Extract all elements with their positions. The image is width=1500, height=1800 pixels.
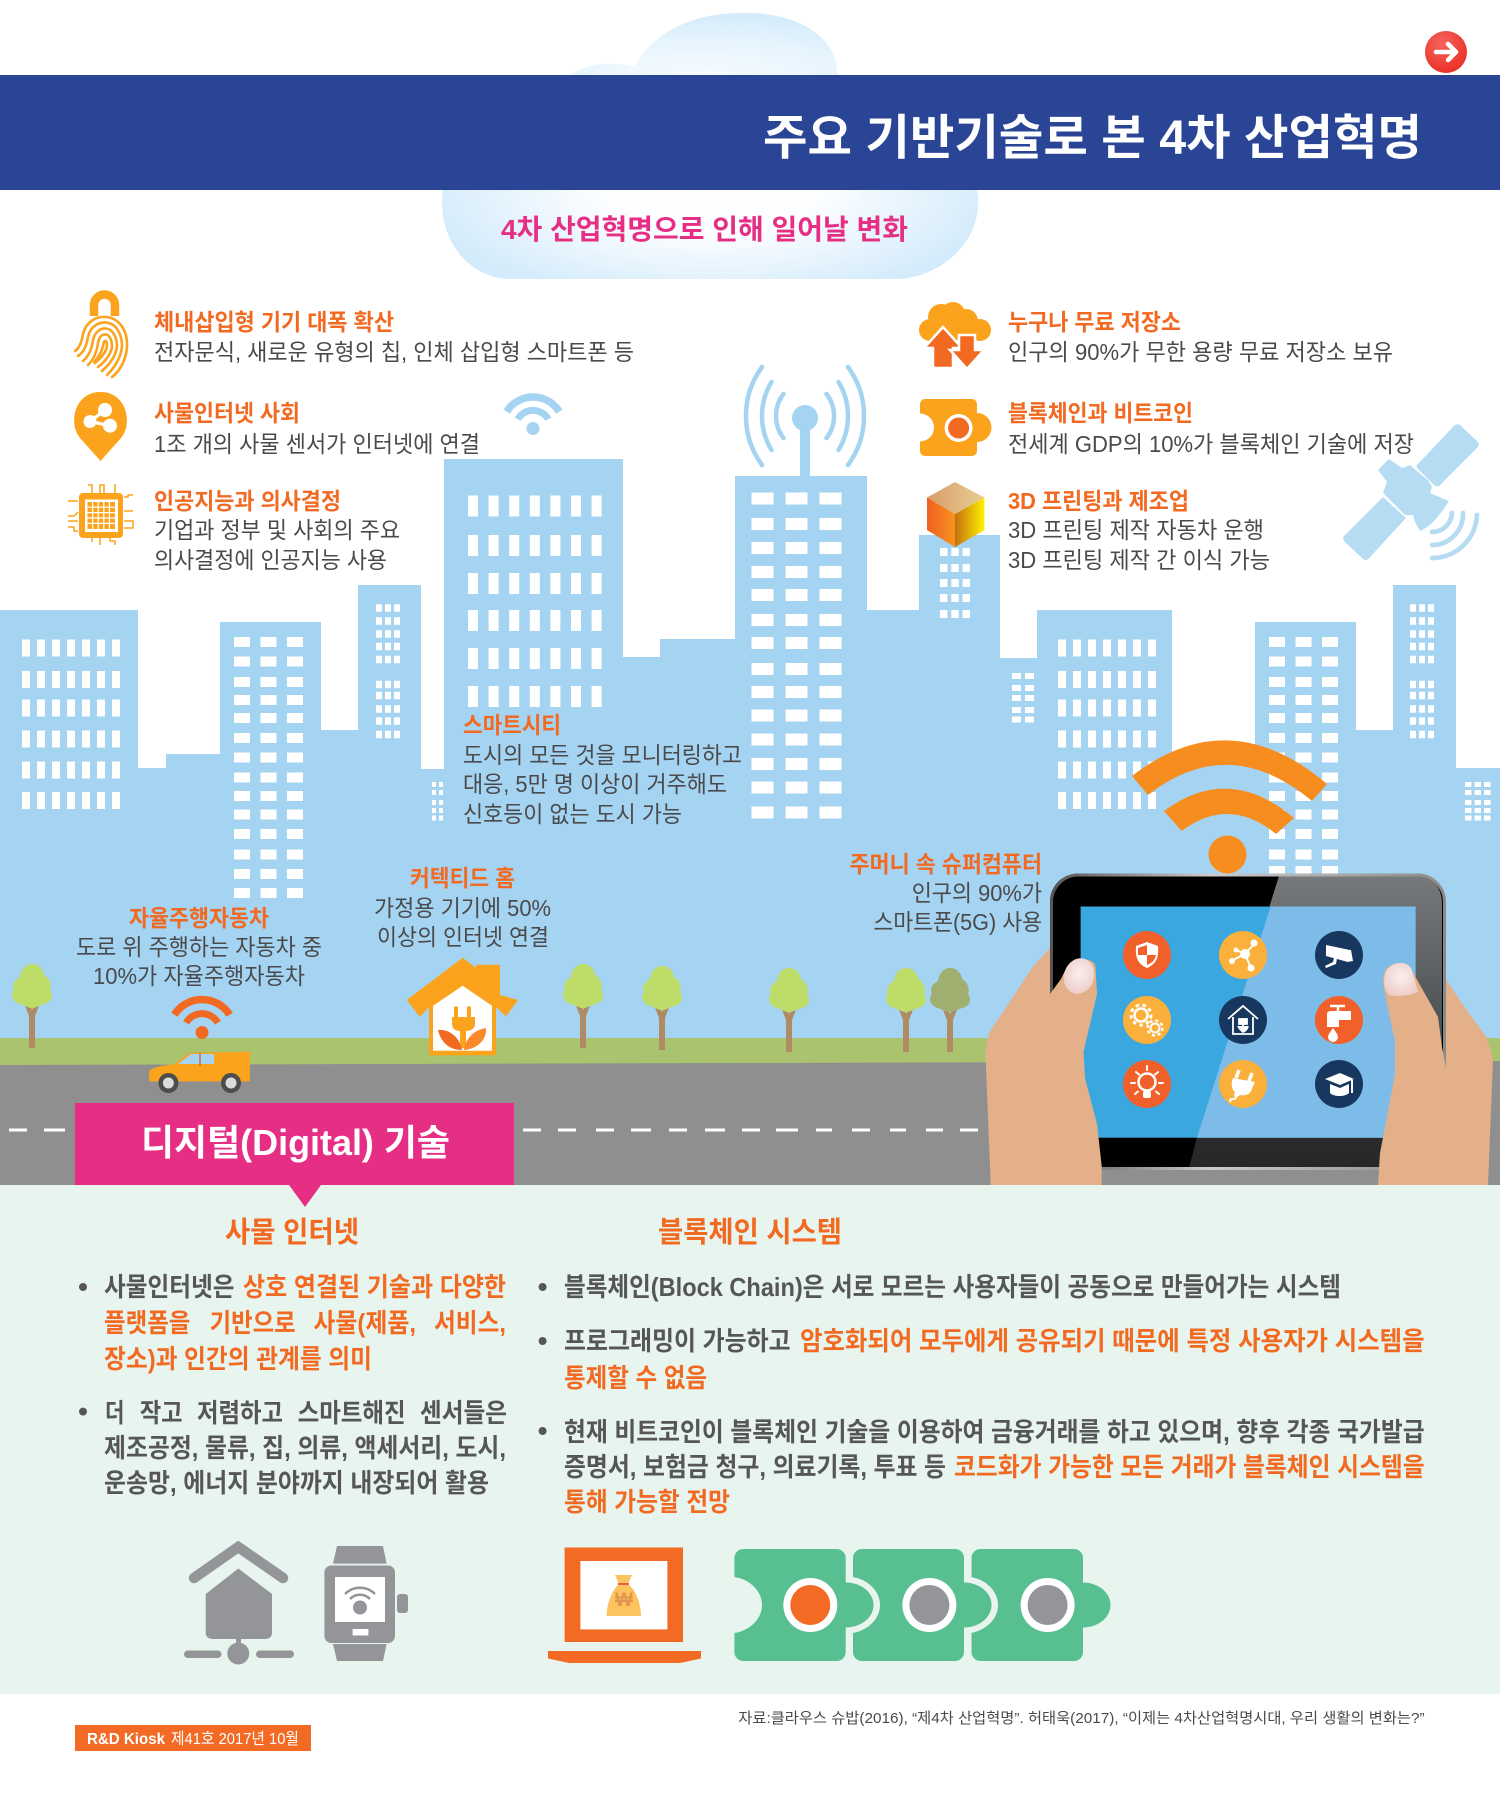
icon: satellite [1343,424,1479,560]
bullet 1: 플랫폼을 [104,1308,190,1338]
heading: 주머니 속 슈퍼컴퓨터 [850,851,1042,877]
bullet 3: 통해 가능할 전망 [564,1487,730,1517]
bullet 1: 상호 연결된 기술과 다양한 [243,1272,506,1302]
description line 2: 의사결정에 인공지능 사용 [154,547,387,573]
heading: 커텍티드 홈 [410,865,515,891]
issue tag [75,1725,311,1751]
bullet 2: 작고 [140,1398,183,1428]
heading: 누구나 무료 저장소 [1008,309,1181,335]
heading: 3D 프린팅과 제조업 [1008,488,1189,514]
bullet 1: 서비스, [434,1308,506,1338]
description: 전자문식, 새로운 유형의 칩, 인체 삽입형 스마트폰 등 [154,339,634,365]
money bag: ₩ [615,1590,633,1611]
callout: autonomous car [76,905,322,989]
bullet 2: 운송망, 에너지 분야까지 내장되어 활용 [104,1468,489,1498]
icon: fingerprint lock [75,294,127,377]
callout: pocket supercomputer [850,851,1042,935]
item: 3D printing [927,482,1270,573]
bullet 3: 증명서, 보험금 청구, 의료기록, 투표 등 [564,1452,946,1482]
bullet 1: 블록체인(Block Chain)은 서로 모르는 사용자들이 공동으로 만들어가는 시스템 [564,1272,1341,1302]
description: 전세계 GDP의 10%가 블록체인 기술에 저장 [1008,431,1414,457]
description line 1: 기업과 정부 및 사회의 주요 [154,517,400,543]
line 1: 도로 위 주행하는 자동차 중 [76,934,322,960]
heading: 체내삽입형 기기 대폭 확산 [154,309,394,335]
app icon: smart home [1219,996,1267,1044]
hand: right with thumb [1378,963,1493,1185]
callout: smart city [463,712,742,827]
icon: car wifi [174,999,230,1039]
heading: 사물인터넷 사회 [154,400,300,426]
heading: 인공지능과 의사결정 [154,488,341,514]
app icon: plug [1219,1060,1267,1108]
bullet 2: 통제할 수 없음 [564,1363,707,1393]
bullet 1: 사물인터넷은 [104,1272,234,1302]
line 2: 대응, 5만 명 이상이 거주해도 [463,771,727,797]
tablet with hands [985,874,1493,1185]
line 3: 신호등이 없는 도시 가능 [463,801,682,827]
bullet 1 [79,1272,506,1374]
icon: car [149,1052,250,1093]
top cloud [568,13,837,76]
ground strip [0,1038,1500,1066]
icon: red arrow button [1425,31,1467,73]
line 1: 가정용 기기에 50% [374,895,551,921]
item: blockchain and bitcoin [906,399,1414,457]
heading: 블록체인과 비트코인 [1008,400,1193,426]
pink banner: digital technology [75,1103,514,1207]
subtitle cloud [442,190,978,279]
trees [12,964,970,1052]
app icon: gears [1123,996,1171,1044]
road [0,1061,1500,1185]
icon: cloud with arrows [919,302,991,369]
thumbnail [1384,963,1418,996]
source note: 자료:클라우스 슈밥(2016), “제4차 산업혁명”. 허태욱(2017), “이제는 4차산업혁명시대, 우리 생활의 변화는?” [738,1710,1425,1727]
icon: location pin with share [74,392,127,461]
item: AI and decision making [68,484,400,573]
digital technology section background [0,1185,1500,1694]
subtitle: 4차 산업혁명으로 인해 일어날 변화 [501,214,908,245]
panel: blockchain system [539,1216,1425,1517]
hand: left with thumb [985,948,1102,1185]
icon: smart watch [324,1546,408,1661]
app icon: graduation cap [1315,1060,1363,1108]
app icon: shield [1123,931,1171,979]
title: 주요 기반기술로 본 4차 산업혁명 [763,112,1422,165]
line 1: 도시의 모든 것을 모니터링하고 [463,742,742,768]
title banner [0,75,1500,190]
item: fingerprint lock [75,294,634,377]
icon: broadcast antenna [746,367,864,478]
item: internet of things society [74,392,480,461]
description line 2: 3D 프린팅 제작 간 이식 가능 [1008,547,1270,573]
bullet 2 [539,1326,1425,1393]
heading: 자율주행자동차 [129,905,269,931]
issue tag: R&D Kiosk [87,1731,165,1748]
icon: laptop with money bag [548,1548,701,1663]
bullet 3 [539,1417,1425,1517]
bullet 2: 센서들은 [420,1398,507,1428]
callout: connected home [374,865,551,950]
issue tag: 제41호 2017년 10월 [171,1730,299,1748]
panel: internet of things [79,1216,507,1498]
line 1: 인구의 90%가 [912,880,1042,906]
bullet 2: 스마트해진 [298,1398,406,1428]
bullet 3: 코드화가 가능한 모든 거래가 블록체인 시스템을 [954,1452,1425,1482]
icon: blockchain puzzle chain [694,1549,1110,1661]
bullet 2: 프로그래밍이 가능하고 [564,1326,791,1356]
line 2: 이상의 인터넷 연결 [377,924,549,950]
bullet 1: 사물(제품, [313,1308,416,1338]
icon: chip [68,484,133,545]
bullet 2: 저렴하고 [197,1398,283,1428]
description line 1: 3D 프린팅 제작 자동차 운행 [1008,517,1264,543]
icon: connected home [407,958,518,1055]
bullet 2: 더 [105,1398,124,1428]
bullet 1: 장소)과 인간의 관계를 의미 [104,1344,372,1374]
icon: large orange wifi [1132,740,1327,874]
bullet 2 [79,1398,507,1498]
line 2: 10%가 자율주행자동차 [93,963,305,989]
bullet 1: 기반으로 [210,1308,296,1338]
icon: networked house [184,1547,294,1664]
bullet 2: 제조공정, 물류, 집, 의류, 액세서리, 도시, [104,1433,506,1463]
item: free storage [919,302,1393,369]
description: 1조 개의 사물 센서가 인터넷에 연결 [154,431,480,457]
icon: blue wifi [507,397,559,435]
app icon: light bulb [1123,1060,1171,1108]
app icon: camera [1315,931,1363,979]
icon: puzzle piece [906,399,992,456]
bullet 2: 암호화되어 모두에게 공유되기 때문에 특정 사용자가 시스템을 [800,1326,1425,1356]
app icon: faucet [1315,996,1363,1044]
thumbnail [1059,954,1099,998]
heading: 스마트시티 [463,712,561,738]
section heading: 사물 인터넷 [225,1216,359,1249]
icon: cube [927,482,984,547]
section heading: 블록체인 시스템 [658,1216,842,1249]
description: 인구의 90%가 무한 용량 무료 저장소 보유 [1008,339,1393,365]
bullet 3: 현재 비트코인이 블록체인 기술을 이용하여 금융거래를 하고 있으며, 향후 각종 국가발급 [564,1417,1425,1447]
line 2: 스마트폰(5G) 사용 [873,909,1042,935]
city skyline [0,459,1500,1040]
banner text: 디지털(Digital) 기술 [141,1122,450,1163]
money bag [607,1575,641,1616]
app icon: network [1219,931,1267,979]
tablet frame [1050,874,1445,1170]
